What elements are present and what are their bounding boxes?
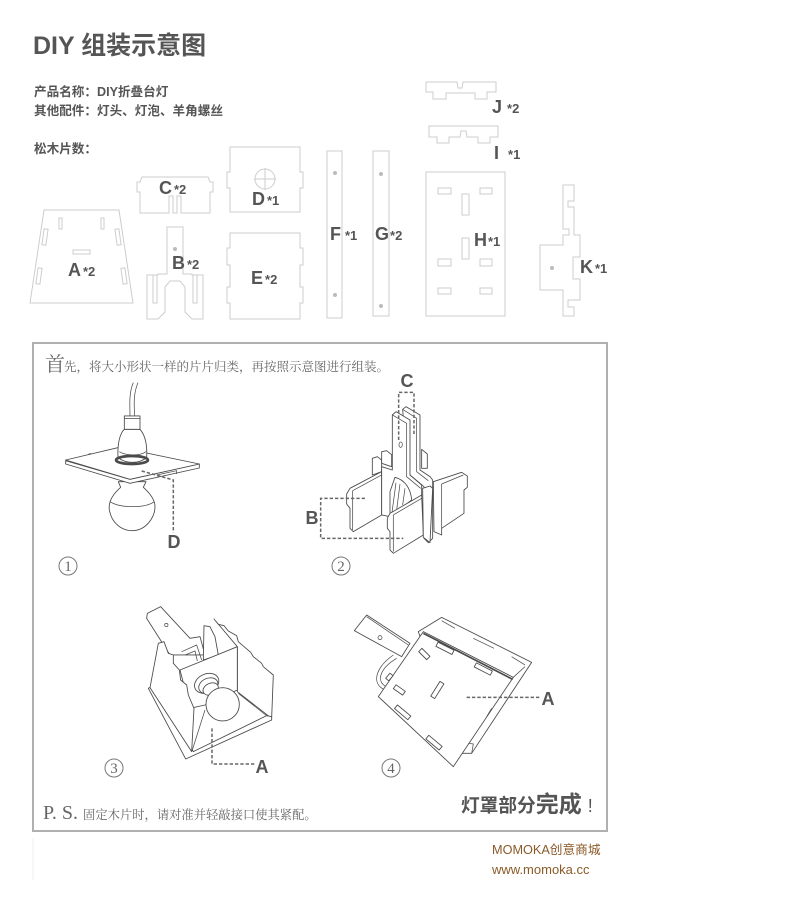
dashed leader A: [467, 695, 540, 700]
product info text: 其他配件：灯头、灯泡、羊角螺丝: [34, 103, 223, 118]
base: [148, 687, 272, 759]
step 2 illustration: [321, 392, 467, 553]
product info text: 产品名称：DIY折叠台灯: [34, 84, 169, 99]
step 4 illustration: [354, 615, 540, 767]
piece A: [30, 210, 133, 303]
piece K: K*1: [580, 257, 607, 277]
back tall piece: [403, 407, 433, 543]
inner shadow lines: [192, 693, 267, 751]
step 1 illustration: [66, 383, 199, 533]
number 3: [105, 759, 123, 777]
center arch: [390, 477, 412, 517]
footer brand: MOMOKA创意商城: [492, 842, 601, 857]
left wall: [150, 642, 194, 752]
piece G: G*2: [375, 224, 402, 244]
piece C: [137, 177, 213, 213]
faint footer edge: [32, 838, 34, 880]
number 3: 3: [110, 761, 118, 777]
front panel: [387, 495, 423, 553]
label A step 4: A: [542, 689, 554, 709]
title: DIY 组装示意图: [33, 31, 206, 60]
number 2: 2: [337, 559, 345, 575]
piece K: [540, 185, 607, 316]
pine pieces heading: 松木片数：: [34, 141, 97, 156]
label D: D: [168, 532, 180, 552]
rear panel: [418, 617, 532, 753]
dashed leader A: [212, 728, 255, 764]
shade plate: [66, 447, 199, 483]
cord: [377, 655, 397, 690]
top tab: [354, 615, 410, 657]
piece C: C*2: [159, 178, 186, 198]
footer url: www.momoka.cc: [491, 862, 590, 877]
piece A: A*2: [68, 260, 95, 280]
piece G: [373, 151, 402, 316]
right panel: [433, 472, 467, 535]
slots: [386, 642, 492, 750]
cord: [130, 383, 138, 416]
number 1: 1: [64, 559, 72, 575]
assembly panel frame: [33, 343, 607, 831]
front tall piece: [382, 412, 422, 517]
tall hole: [399, 442, 402, 447]
piece J: J *2: [492, 97, 519, 117]
left panel: [347, 472, 382, 532]
piece B: B*2: [172, 253, 199, 273]
center wall: [180, 647, 237, 708]
label B: B: [306, 508, 318, 528]
dashed leader B: [321, 498, 403, 538]
number 4: 4: [387, 761, 395, 777]
socket: [116, 416, 148, 464]
dashed leader C: [399, 392, 414, 440]
piece F: F *1: [330, 224, 357, 244]
piece E: E*2: [251, 268, 277, 288]
left spike: [372, 457, 382, 475]
piece H: [426, 172, 505, 316]
main plate: [378, 632, 513, 767]
intro text: 首先，将大小形状一样的片片归类，再按照示意图进行组装。: [45, 353, 389, 376]
back tab: [422, 449, 427, 468]
piece I: I *1: [494, 143, 520, 163]
dashed leader D: [142, 471, 173, 533]
piece D: [227, 147, 303, 212]
piece B: [147, 227, 203, 319]
piece E: [227, 233, 303, 319]
piece D: D*1: [252, 189, 279, 209]
product info text: [34, 84, 223, 118]
number 2: [332, 557, 350, 575]
number 1: [59, 557, 77, 575]
label C: C: [400, 371, 414, 391]
step 3 illustration: [147, 607, 273, 764]
piece J: [426, 82, 519, 117]
P.S. note: P. S. 固定木片时，请对准并轻敲接口使其紧配。: [43, 802, 317, 824]
label A step 3: A: [256, 757, 268, 777]
completion text: 灯罩部分完成 !: [461, 791, 593, 817]
number 4: [382, 759, 400, 777]
right wall: [214, 619, 273, 718]
piece I: [429, 126, 520, 163]
bulb: [109, 482, 155, 531]
bulb: [191, 670, 239, 721]
piece H: H*1: [474, 230, 500, 250]
top tab: [147, 607, 205, 655]
piece F: [327, 151, 357, 318]
inner tab: [203, 626, 218, 660]
